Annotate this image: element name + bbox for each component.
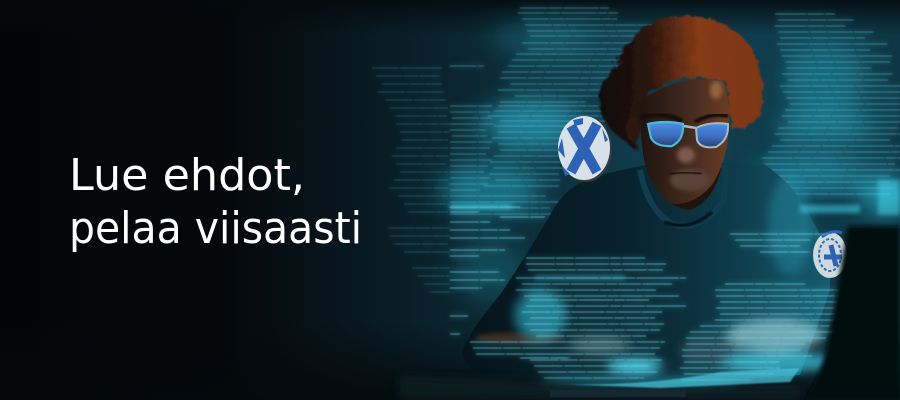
code lines left and upper background (372, 8, 658, 292)
code lines over torso (450, 207, 866, 380)
headline line 1: Lue ehdot, (69, 150, 305, 201)
face (626, 79, 729, 204)
code glow on arm and window (450, 180, 900, 280)
poker chip left (558, 116, 612, 182)
hands and bright glow (514, 289, 840, 386)
neck (645, 165, 722, 223)
laptop (805, 224, 900, 400)
headline line 2: pelaa viisaasti (69, 203, 362, 254)
hair (600, 16, 763, 150)
code lines right background (762, 14, 900, 194)
shirt (462, 163, 830, 385)
desk (400, 368, 800, 400)
glow clouds behind code (440, 20, 900, 300)
glasses (648, 122, 728, 147)
headline (69, 150, 362, 254)
poker chip right (813, 232, 847, 278)
